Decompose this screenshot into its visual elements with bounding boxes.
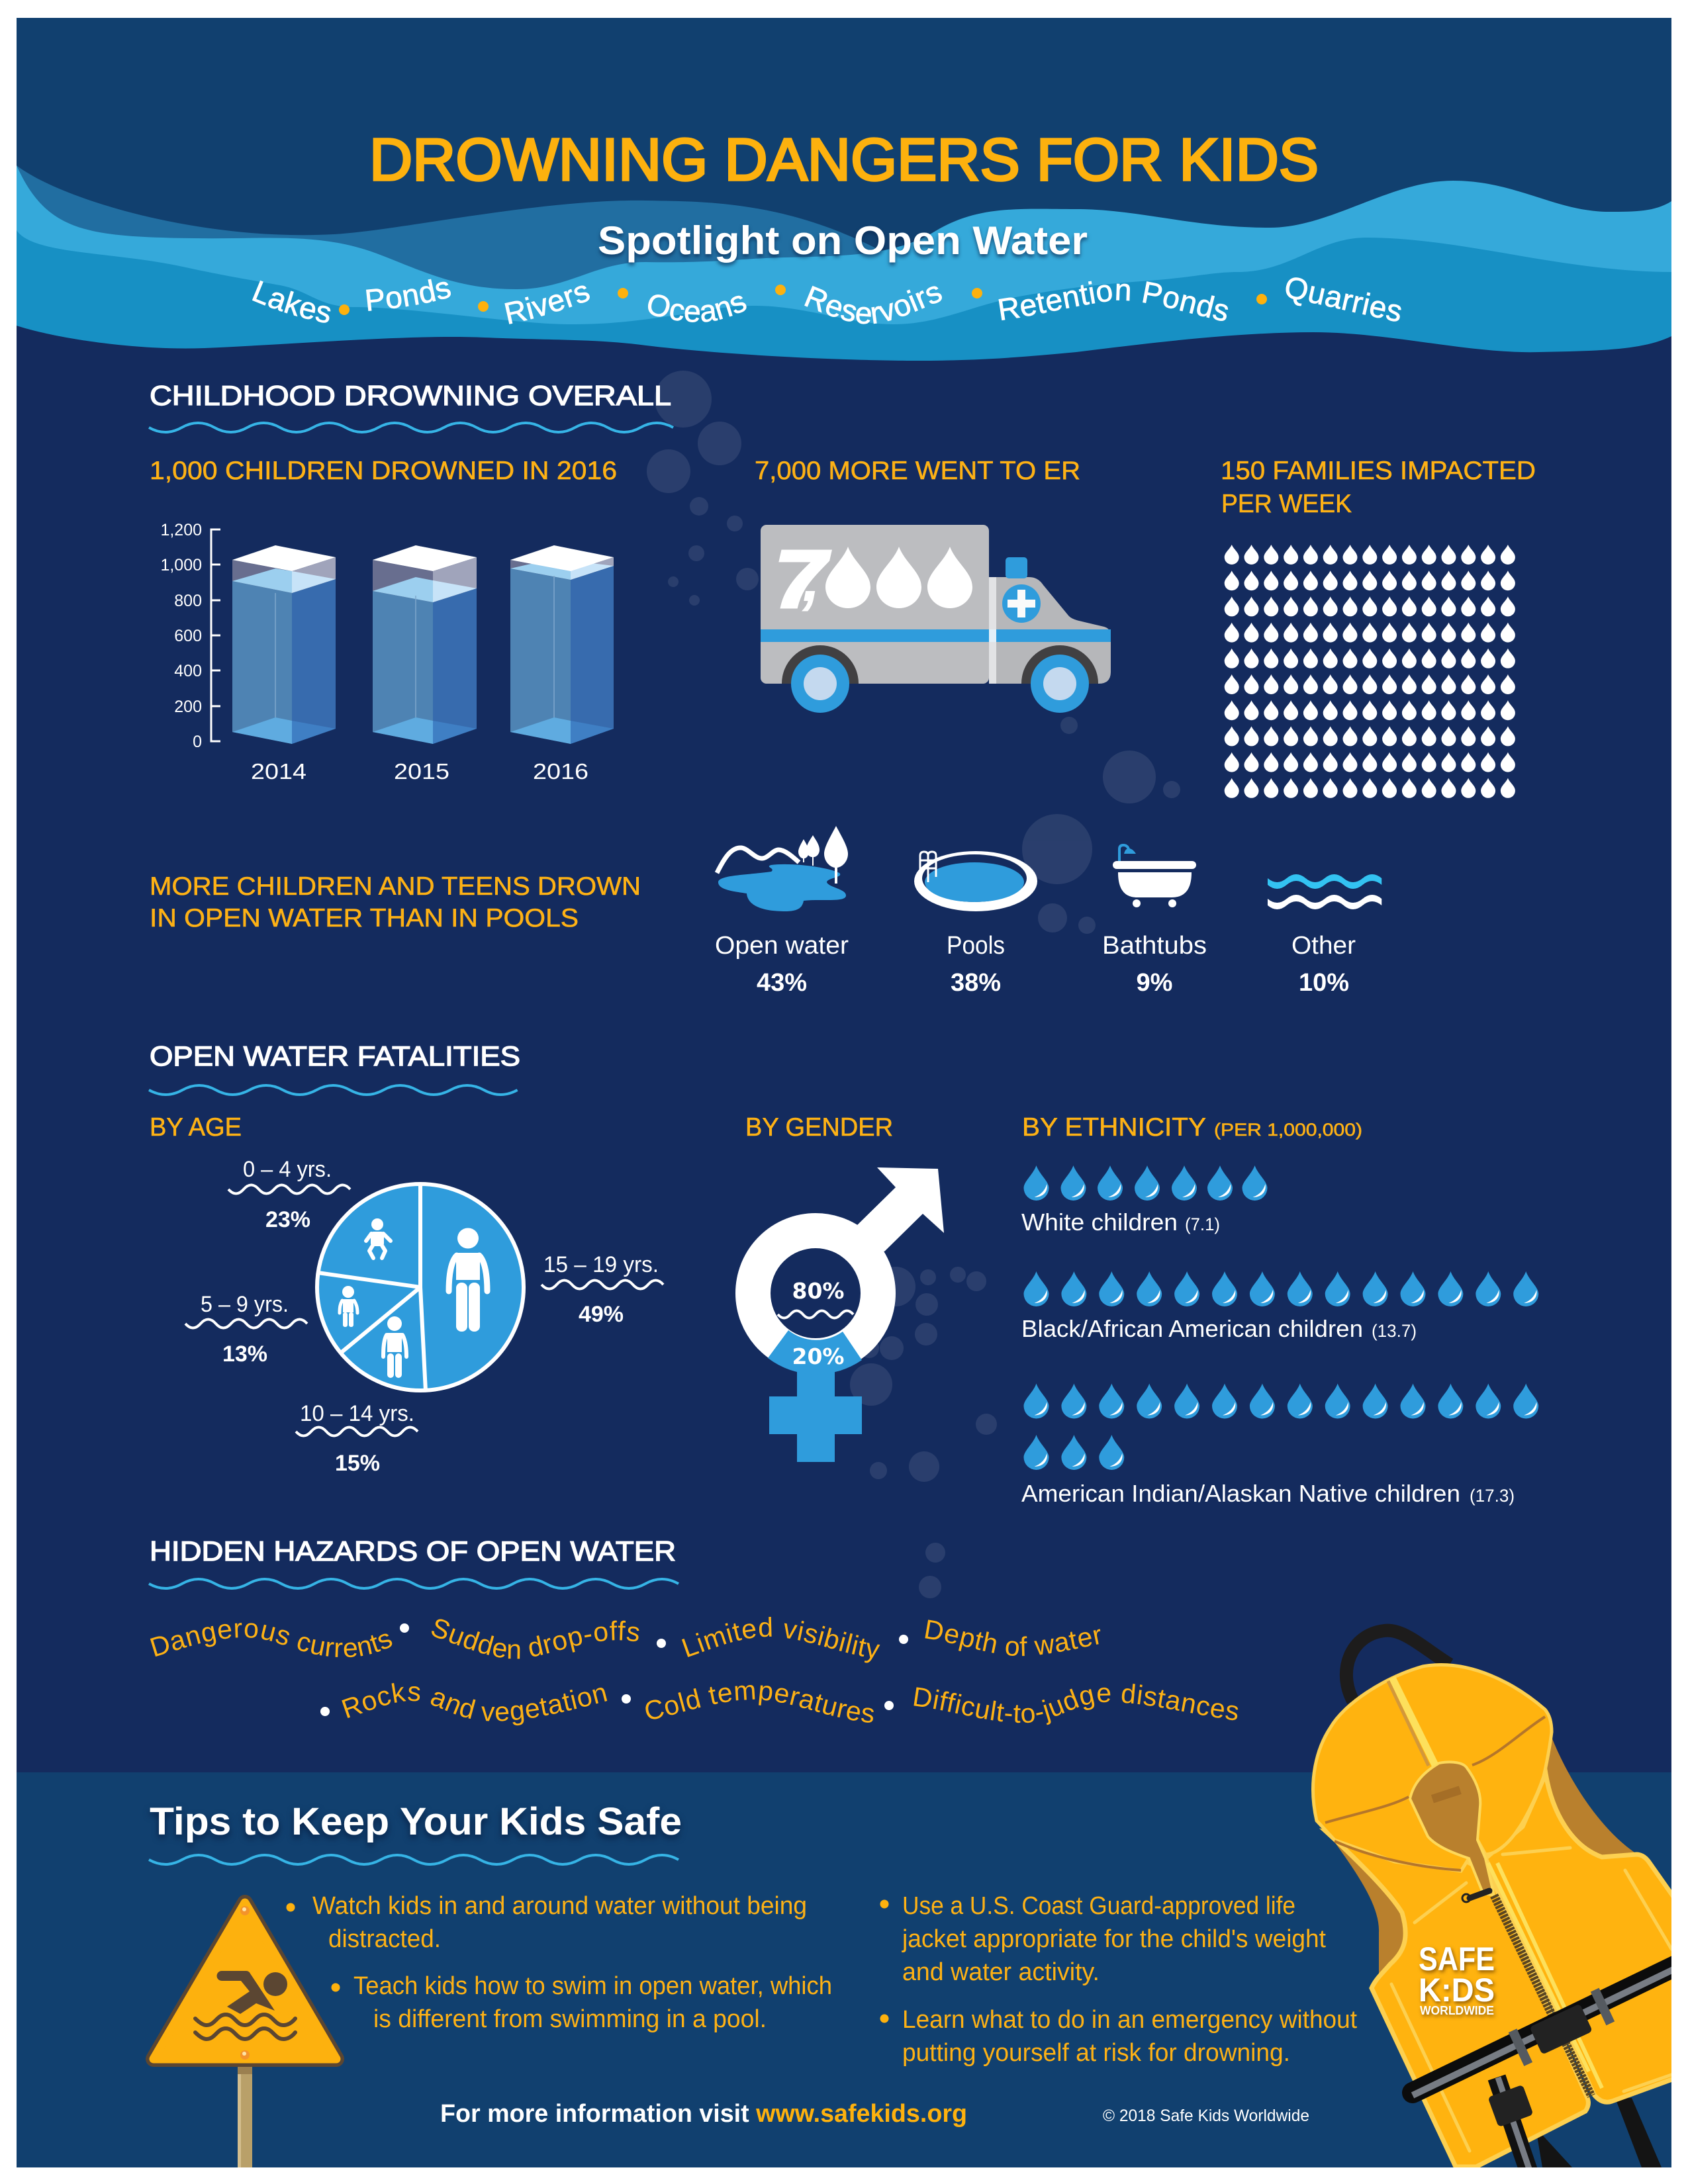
year labels: 2015 bbox=[394, 759, 449, 784]
chart axis: 600 bbox=[174, 627, 202, 645]
icon: teen bbox=[449, 1228, 487, 1332]
tip: life jacket: jacket appropriate for the child's weight bbox=[902, 1925, 1326, 1953]
tip: life jacket: Use a U.S. Coast Guard-approved life bbox=[902, 1892, 1295, 1920]
bar 2014 bbox=[232, 545, 336, 744]
ethnicity: black children: Black/African American children bbox=[1021, 1315, 1363, 1342]
jacket waist strap bbox=[1413, 1963, 1681, 2093]
age label: 0-4 bbox=[228, 1157, 350, 1232]
labels: drowning location share bbox=[715, 932, 1356, 997]
stat heading: 150 families: PER WEEK bbox=[1221, 490, 1352, 518]
ethnicity: white children: White children bbox=[1021, 1208, 1178, 1236]
heading: tips bbox=[149, 1800, 682, 1864]
heading: hidden hazards bbox=[149, 1535, 679, 1588]
water types on wave: Ponds bbox=[366, 279, 451, 311]
ethnicity: white children bbox=[1021, 1165, 1267, 1236]
logo: Safe Kids Worldwide bbox=[1419, 1940, 1495, 2017]
icon grid: 150 drops bbox=[1225, 545, 1515, 798]
logo: Safe Kids Worldwide: WORLDWIDE bbox=[1420, 2004, 1494, 2017]
labels: drowning location share: Pools bbox=[947, 932, 1005, 960]
icon: infant bbox=[366, 1218, 391, 1258]
chart axis: 1,200 bbox=[160, 521, 202, 539]
pie chart: age bbox=[317, 1184, 524, 1391]
tip: emergency: Learn what to do in an emergency without bbox=[902, 2006, 1357, 2034]
chart axis bbox=[160, 521, 220, 751]
age label: 5-9 bbox=[185, 1292, 307, 1367]
age label: 5-9: 5 – 9 yrs. bbox=[201, 1292, 289, 1317]
ethnicity: white children: (7.1) bbox=[1185, 1214, 1220, 1234]
icon: child 5-9 bbox=[340, 1286, 357, 1327]
tip: emergency bbox=[880, 2006, 1357, 2067]
bar 2016 bbox=[510, 545, 614, 744]
icon: pool bbox=[914, 851, 1037, 911]
heading: childhood drowning overall: CHILDHOOD DROWNING OVERALL bbox=[150, 380, 671, 411]
footer link: For more information visit www.safekids.org bbox=[440, 2100, 967, 2128]
age label: 10-14: 15% bbox=[335, 1451, 380, 1476]
ethnicity: native children: American Indian/Alaskan Native children bbox=[1021, 1480, 1460, 1507]
stat heading: by gender: BY GENDER bbox=[745, 1113, 893, 1142]
age label: 0-4: 23% bbox=[265, 1207, 310, 1232]
chart axis: 0 bbox=[193, 733, 202, 751]
labels: drowning location share: Other bbox=[1291, 932, 1356, 960]
header waves bbox=[17, 165, 1671, 1772]
copyright: © 2018 Safe Kids Worldwide bbox=[1103, 2107, 1309, 2125]
title: DROWNING DANGERS FOR KIDS bbox=[369, 127, 1319, 193]
heading: open water fatalities bbox=[149, 1040, 520, 1095]
stat heading: by ethnicity: (PER 1,000,000) bbox=[1214, 1120, 1362, 1140]
tip: teach kids to swim bbox=[331, 1972, 832, 2033]
labels: drowning location share: 9% bbox=[1137, 969, 1172, 997]
age label: 10-14 bbox=[296, 1401, 418, 1476]
icon: other waves bbox=[1268, 874, 1382, 909]
jacket collar bbox=[1313, 1664, 1552, 1871]
water types on wave bbox=[252, 277, 1401, 324]
age label: 15-19 bbox=[541, 1252, 663, 1327]
tip: life jacket bbox=[880, 1892, 1326, 1986]
chart axis: 1,000 bbox=[160, 556, 202, 574]
age label: 0-4: 0 – 4 yrs. bbox=[243, 1157, 332, 1182]
icon: ambulance with 7,000: 7 bbox=[774, 534, 830, 624]
labels: drowning location share: Open water bbox=[715, 932, 849, 960]
text: more children and teens: MORE CHILDREN AND TEENS DROWN bbox=[150, 872, 641, 901]
jacket left panel bbox=[1327, 1832, 1588, 2167]
age label: 5-9: 13% bbox=[222, 1342, 267, 1367]
jacket seams bbox=[1325, 1717, 1545, 1870]
ethnicity: black children: (13.7) bbox=[1372, 1321, 1417, 1341]
heading: open water fatalities: OPEN WATER FATALITIES bbox=[150, 1040, 520, 1071]
list: hazards on curved paths: Limited visibility bbox=[682, 1617, 880, 1662]
age label: 15-19: 15 – 19 yrs. bbox=[543, 1252, 659, 1277]
labels: drowning location share: 38% bbox=[951, 969, 1001, 997]
heading: tips: Tips to Keep Your Kids Safe bbox=[150, 1800, 682, 1843]
icon: bathtub bbox=[1113, 845, 1196, 907]
ethnicity: black children bbox=[1021, 1271, 1538, 1342]
stat heading: 150 families bbox=[1221, 457, 1536, 518]
subtitle: Spotlight on Open Water bbox=[598, 218, 1088, 263]
year labels: 2014 bbox=[251, 759, 306, 784]
stat heading: 7,000 ER: 7,000 MORE WENT TO ER bbox=[755, 457, 1080, 485]
list: hazards on curved paths: Sudden drop-offs bbox=[432, 1619, 639, 1659]
chart: gender symbol: 20% bbox=[792, 1343, 845, 1369]
jacket handle strap bbox=[1346, 1631, 1450, 1701]
labels: drowning location share: Bathtubs bbox=[1102, 932, 1207, 960]
chart axis: 800 bbox=[174, 592, 202, 610]
water types on wave: Oceans bbox=[647, 295, 747, 322]
tip: teach kids to swim: Teach kids how to swim in open water, which bbox=[353, 1972, 832, 2000]
tip: watch kids: distracted. bbox=[328, 1925, 441, 1953]
jacket right panel bbox=[1485, 1774, 1685, 2102]
chart axis: 400 bbox=[174, 662, 202, 680]
chart: gender symbol bbox=[753, 1167, 944, 1462]
jacket back straps bbox=[1536, 2098, 1662, 2167]
water types on wave: Lakes bbox=[252, 281, 331, 323]
list: hazards on curved paths: Rocks and vegetation bbox=[342, 1683, 608, 1726]
icon: ambulance with 7,000 bbox=[761, 525, 1111, 713]
tip: watch kids bbox=[286, 1892, 807, 1953]
icon: child 10-14 bbox=[383, 1316, 406, 1378]
age label: 10-14: 10 – 14 yrs. bbox=[300, 1401, 414, 1426]
text: more children and teens bbox=[150, 872, 641, 933]
list: hazards on curved paths: Depth of water bbox=[925, 1619, 1100, 1656]
stat heading: by ethnicity bbox=[1022, 1113, 1362, 1142]
logo: Safe Kids Worldwide: K:DS bbox=[1419, 1972, 1495, 2009]
age label: 15-19: 49% bbox=[579, 1302, 624, 1327]
icon: warning sign with swimmer bbox=[154, 1903, 336, 2167]
tip: watch kids: Watch kids in and around water without being bbox=[312, 1892, 807, 1920]
stat heading: by ethnicity: BY ETHNICITY bbox=[1022, 1113, 1206, 1142]
illustration: life jacket bbox=[1313, 1631, 1685, 2171]
jacket collar opening bbox=[1410, 1762, 1494, 1895]
stat heading: by age: BY AGE bbox=[150, 1113, 242, 1142]
chart axis: 200 bbox=[174, 698, 202, 716]
water types on wave: Rivers bbox=[504, 286, 590, 324]
list: hazards on curved paths: Difficult-to-judge distances bbox=[914, 1684, 1238, 1725]
year labels: 2016 bbox=[533, 759, 588, 784]
year labels bbox=[251, 759, 588, 784]
ethnicity: native children: (17.3) bbox=[1470, 1486, 1515, 1506]
ethnicity: native children bbox=[1021, 1383, 1538, 1507]
bar chart: drownings 2014–2016 bbox=[160, 521, 614, 784]
water types on wave: Retention Ponds bbox=[998, 281, 1229, 321]
heading: hidden hazards: HIDDEN HAZARDS OF OPEN WATER bbox=[150, 1535, 676, 1567]
jacket highlights bbox=[1391, 1848, 1671, 2151]
list: hazards on curved paths: Dangerous currents bbox=[150, 1623, 392, 1657]
jacket back shading bbox=[1331, 1737, 1642, 1976]
tip: emergency: putting yourself at risk for drowning. bbox=[902, 2039, 1290, 2067]
chart: gender symbol: 80% bbox=[792, 1278, 845, 1304]
icon: open water bbox=[717, 826, 848, 911]
bubbles: trail of background bubbles bbox=[647, 371, 1180, 1598]
logo: Safe Kids Worldwide: SAFE bbox=[1419, 1940, 1495, 1978]
jacket zipper bbox=[1494, 1895, 1591, 2096]
labels: drowning location share: 10% bbox=[1299, 969, 1349, 997]
list: hazards on curved paths: Cold temperatures bbox=[645, 1685, 874, 1723]
water types on wave: Quarries bbox=[1286, 277, 1401, 322]
stat heading: 1,000 children: 1,000 CHILDREN DROWNED IN 2016 bbox=[150, 457, 617, 485]
tip: life jacket: and water activity. bbox=[902, 1958, 1100, 1986]
stat heading: 150 families: 150 FAMILIES IMPACTED bbox=[1221, 457, 1536, 485]
labels: drowning location share: 43% bbox=[757, 969, 807, 997]
list: hazards on curved paths bbox=[150, 1617, 1238, 1726]
water types on wave: Reservoirs bbox=[804, 286, 942, 324]
icon: ambulance with 7,000: , bbox=[802, 541, 821, 615]
panel: tips band bbox=[17, 1772, 1671, 2167]
text: more children and teens: IN OPEN WATER THAN IN POOLS bbox=[150, 904, 579, 933]
tip: teach kids to swim: is different from swimming in a pool. bbox=[373, 2005, 767, 2033]
bar 2015 bbox=[373, 545, 477, 744]
jacket lower strap bbox=[1497, 2077, 1528, 2171]
heading: childhood drowning overall bbox=[149, 380, 673, 432]
